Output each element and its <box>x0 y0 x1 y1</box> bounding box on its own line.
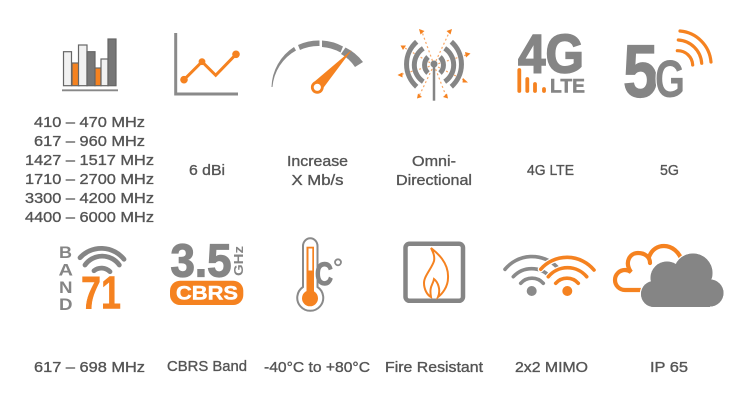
icon: 5G with signal arcs: 5 <box>623 30 658 113</box>
text: temperature range: -40°C to +80°C <box>264 359 370 376</box>
icon: Band 71: D <box>59 295 72 314</box>
icon: 4G LTE: 4G <box>518 22 584 84</box>
icon: Band 71: B <box>59 243 72 262</box>
text: Omni-Directional: Omni- <box>412 153 456 170</box>
text: Increase X Mb/s <box>287 153 348 189</box>
text: frequency ranges: 410 – 470 MHz <box>34 114 145 131</box>
text: frequency ranges: 1427 – 1517 MHz <box>25 152 154 169</box>
text: Fire Resistant: Fire Resistant <box>385 359 484 376</box>
icon: 5G with signal arcs <box>623 30 711 113</box>
icon: omni-directional antenna <box>398 29 470 101</box>
text: frequency ranges: 4400 – 6000 MHz <box>25 209 154 226</box>
text: Increase X Mb/s: Increase <box>287 153 348 170</box>
text: 4G LTE: 4G LTE <box>527 162 574 179</box>
icon: Band 71: A <box>58 260 73 280</box>
icon: thermometer <box>297 238 341 311</box>
text: Omni-Directional: Directional <box>396 172 472 189</box>
text: frequency ranges: 1710 – 2700 MHz <box>25 171 154 188</box>
text: CBRS Band: CBRS Band <box>167 358 247 375</box>
text: IP 65: IP 65 <box>650 359 688 376</box>
text: frequency ranges: 3300 – 4200 MHz <box>25 190 154 207</box>
icon: 3.5 GHz CBRS: CBRS <box>176 284 238 304</box>
icon: Band 71: N <box>59 278 72 297</box>
text: 5G: 5G <box>660 162 679 179</box>
icon: Band 71 <box>58 243 124 318</box>
icon: speedometer gauge <box>272 40 363 92</box>
icon: 2x2 MIMO wifi <box>505 257 594 296</box>
text: Omni-Directional <box>396 153 472 189</box>
text: 6 dBi: 6 dBi <box>189 162 225 179</box>
icon: 3.5 GHz CBRS <box>170 234 246 305</box>
text: frequency ranges: 617 – 960 MHz <box>34 133 145 150</box>
icon: bar chart <box>62 39 118 90</box>
text: Increase X Mb/s: X Mb/s <box>292 172 344 189</box>
text: 2x2 MIMO: 2x2 MIMO <box>515 359 588 376</box>
icon: 4G LTE: LTE <box>550 76 585 98</box>
icon: IP65 clouds <box>615 246 724 307</box>
icon: Band 71: 71 <box>81 266 121 318</box>
icon: 3.5 GHz CBRS: 3.5 <box>170 234 232 286</box>
icon: line chart <box>176 33 240 94</box>
icon: thermometer: C <box>315 256 333 292</box>
icon: fire resistant <box>406 244 463 301</box>
icon: 3.5 GHz CBRS: GHz <box>231 245 246 276</box>
text: 617 – 698 MHz: 617 – 698 MHz <box>34 359 145 376</box>
text: frequency ranges <box>25 114 154 226</box>
icon: 5G with signal arcs: G <box>655 50 685 109</box>
